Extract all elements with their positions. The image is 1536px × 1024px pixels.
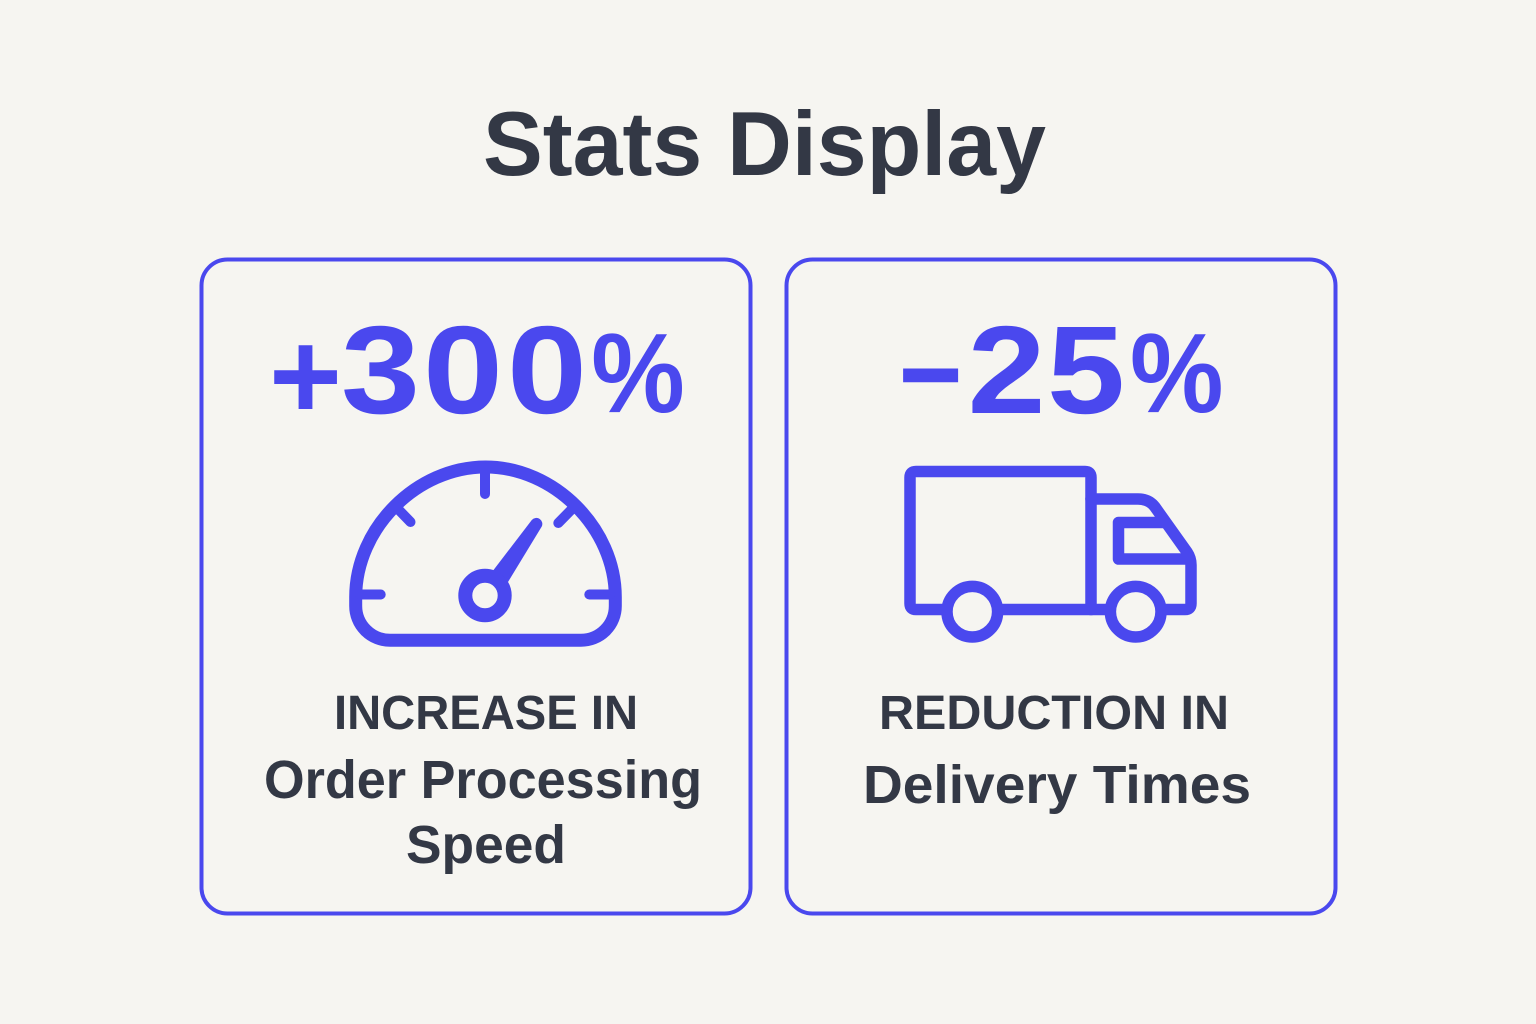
stat: +300%: 0	[423, 301, 503, 440]
stat: +300%: 0	[507, 301, 587, 440]
panel: order processing	[202, 260, 750, 914]
stat: -25%: −	[898, 305, 962, 444]
stat: -25%: 5	[1047, 301, 1125, 440]
label: increase in: INCREASE IN	[334, 687, 638, 740]
stat: +300%: %	[591, 310, 685, 436]
label: order processing: Order Processing	[264, 750, 702, 810]
icon: truck	[910, 472, 1191, 637]
panel: delivery times	[786, 260, 1336, 914]
stat: -25%: %	[1130, 310, 1224, 436]
label: speed: Speed	[406, 815, 566, 875]
label: reduction in: REDUCTION IN	[879, 687, 1229, 740]
stat: -25%: 2	[968, 301, 1046, 440]
title: Stats Display	[483, 94, 1046, 195]
stat: +300%: 3	[341, 301, 420, 440]
icon: speedometer	[356, 467, 615, 640]
label: delivery times: Delivery Times	[863, 755, 1251, 815]
stat: +300%: +	[269, 307, 342, 446]
